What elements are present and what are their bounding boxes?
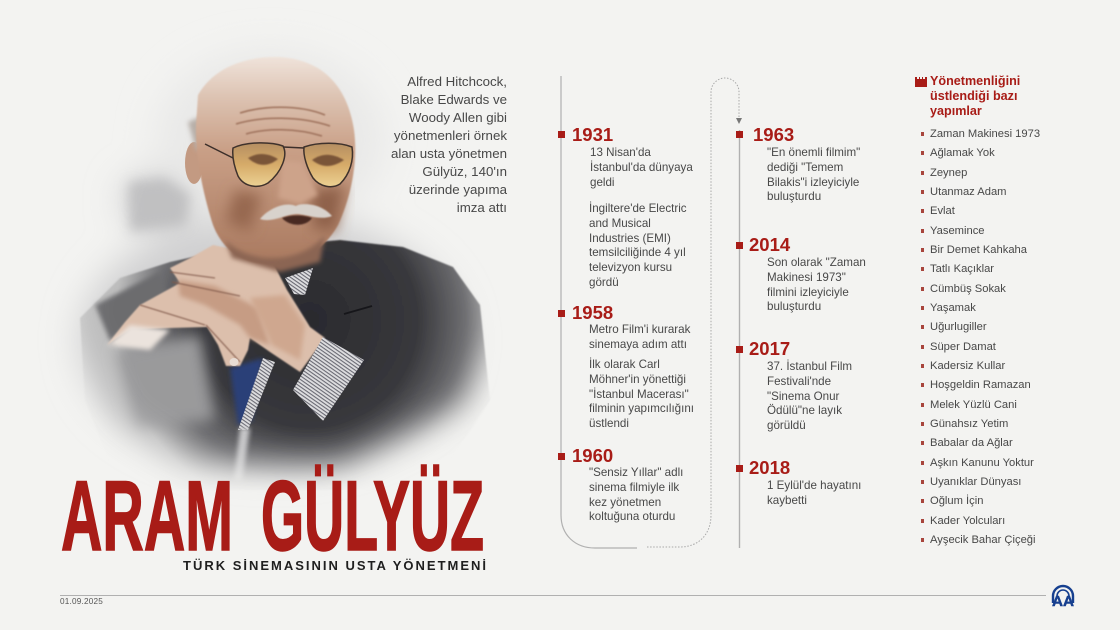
- mustache: [260, 204, 332, 220]
- list of productions: Yaşamak: [930, 302, 976, 314]
- list of productions: Utanmaz Adam: [930, 186, 1006, 198]
- list of productions: Zaman Makinesi 1973: [930, 128, 1040, 140]
- title and subtitle: [61, 460, 486, 573]
- list of productions: Süper Damat: [930, 341, 996, 353]
- list of productions: Melek Yüzlü Cani: [930, 399, 1017, 411]
- list of productions: Kader Yolcuları: [930, 515, 1005, 527]
- list of productions: Hoşgeldin Ramazan: [930, 379, 1031, 391]
- list of productions: Ayşecik Bahar Çiçeği: [930, 534, 1036, 546]
- head: [196, 57, 355, 264]
- panel: selected works: [915, 74, 1020, 118]
- portrait of Aram Gülyüz: [69, 56, 489, 490]
- shirt placket: [238, 358, 275, 430]
- eyes: [248, 154, 278, 165]
- event 2017: 37. İstanbul Film Festivali'nde "Sinema Onur Ödülü"ne layık görüldü: [767, 360, 852, 432]
- timeline column 2: [736, 124, 866, 507]
- blue tie: [230, 358, 263, 425]
- event 2014: 2014: [749, 234, 790, 255]
- list of productions: Uyanıklar Dünyası: [930, 476, 1021, 488]
- soft grey haze behind portrait: [80, 50, 460, 465]
- event 2018: 1 Eylül'de hayatını kaybetti: [767, 479, 861, 507]
- intro text: Alfred Hitchcock, Blake Edwards ve Woody Allen gibi yönetmenleri örnek alan usta yönetmen Gülyüz, 140'ın üzerinde yapıma imza attı: [391, 74, 507, 215]
- suit jacket: [80, 240, 490, 490]
- event 1931: İngiltere'de Electric and Musical Industries (EMI) temsilciliğinde 4 yıl televizyon kursu gördü: [589, 202, 687, 289]
- mouth: [282, 215, 312, 225]
- event 1963: "En önemli filmim" dediği "Temem Bilakis"i izleyiciyle buluşturdu: [767, 146, 860, 203]
- subtitle: TÜRK SİNEMASININ USTA YÖNETMENİ: [183, 558, 486, 573]
- nose: [278, 160, 318, 204]
- list of productions: Ağlamak Yok: [930, 147, 995, 159]
- event 1931: 1931: [572, 124, 613, 145]
- event 1963: 1963: [753, 124, 794, 145]
- event 2018: [736, 457, 861, 507]
- event 2017: [736, 338, 852, 432]
- event 1960: "Sensiz Yıllar" adlı sinema filmiyle ilk kez yönetmen koltuğuna oturdu: [589, 466, 683, 523]
- event 1958: İlk olarak Carl Möhner'in yönettiği "İstanbul Macerası" filminin yapımcılığını üstlendi: [589, 358, 694, 430]
- timeline column 1: [558, 124, 694, 523]
- list of productions: Evlat: [930, 205, 955, 217]
- icon: Anadolu Agency logo: [1052, 584, 1074, 609]
- list of productions: Aşkın Kanunu Yoktur: [930, 457, 1034, 469]
- event 2017: 2017: [749, 338, 790, 359]
- list of productions: Bir Demet Kahkaha: [930, 244, 1027, 256]
- forearm and hands: [107, 245, 325, 372]
- list of productions: Kadersiz Kullar: [930, 360, 1005, 372]
- list heading: Yönetmenliğini üstlendiği bazı yapımlar: [930, 74, 1020, 118]
- event 1963: [736, 124, 860, 203]
- icon: film clapper: [915, 77, 927, 87]
- glasses: [205, 143, 352, 187]
- list of productions: Babalar da Ağlar: [930, 437, 1013, 449]
- footer rule: [60, 594, 1046, 596]
- shirt cuff: [293, 337, 364, 421]
- event 1960: 1960: [572, 445, 613, 466]
- list of productions: Günahsız Yetim: [930, 418, 1008, 430]
- event 1931: [558, 124, 693, 289]
- event 1931: 13 Nisan'da İstanbul'da dünyaya geldi: [590, 146, 693, 188]
- event 1958: 1958: [572, 302, 613, 323]
- collar: [285, 268, 313, 295]
- list of productions: Cümbüş Sokak: [930, 283, 1006, 295]
- figure: [80, 57, 490, 490]
- date: 01.09.2025: [60, 597, 103, 606]
- list of productions: Yasemince: [930, 225, 985, 237]
- forehead wrinkles: [236, 107, 330, 136]
- event 2018: 2018: [749, 457, 790, 478]
- ear and side hair: [185, 142, 203, 184]
- title: ARAM: [61, 460, 233, 571]
- event 1958: [558, 302, 694, 430]
- list of productions: Zeynep: [930, 167, 967, 179]
- grey paint splash: [128, 178, 190, 232]
- event 1960: [558, 445, 683, 523]
- event 2014: [736, 234, 866, 313]
- list of productions: Oğlum İçin: [930, 495, 983, 507]
- list of productions: Uğurlugiller: [930, 321, 987, 333]
- event 1958: Metro Film'i kurarak sinemaya adım attı: [589, 323, 690, 351]
- list of productions: Tatlı Kaçıklar: [930, 263, 994, 275]
- cheeks and neck shadow: [226, 190, 262, 232]
- event 2014: Son olarak "Zaman Makinesi 1973" filmini izleyiciyle buluşturdu: [767, 256, 866, 313]
- list of productions: [921, 128, 1040, 546]
